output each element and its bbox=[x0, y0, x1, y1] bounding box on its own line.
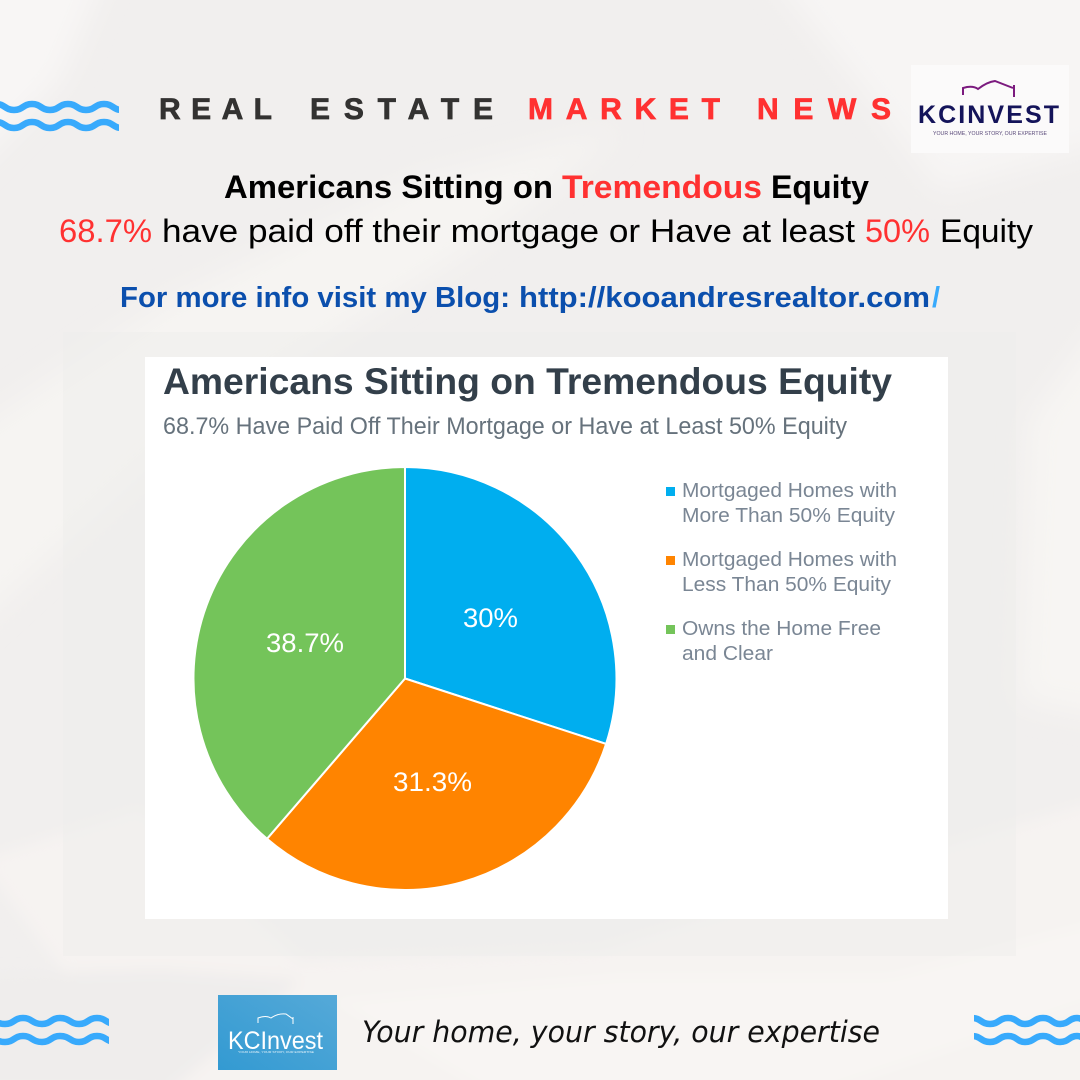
legend item: free and clear: and Clear bbox=[682, 643, 773, 665]
slice: 30% bbox=[405, 467, 616, 744]
logo: KCInvest blue bbox=[218, 995, 337, 1070]
panel: pie chart card bbox=[145, 357, 948, 919]
subheadline: Equity bbox=[940, 213, 1033, 249]
panel: chart backdrop bbox=[63, 332, 1016, 956]
pie labels bbox=[266, 603, 518, 797]
pie labels: 31.3% bbox=[393, 767, 472, 797]
headline bbox=[224, 169, 869, 205]
pie chart bbox=[193, 467, 616, 890]
heading: real estate market news: ESTATE bbox=[310, 93, 493, 126]
headline: Americans Sitting on bbox=[224, 169, 553, 205]
legend item: more than 50%: More Than 50% Equity bbox=[682, 505, 895, 527]
subheadline: 50% bbox=[865, 213, 930, 249]
pie labels: 30% bbox=[463, 603, 518, 633]
legend item: less than 50%: Less Than 50% Equity bbox=[682, 574, 891, 596]
legend item: less than 50%: Mortgaged Homes with bbox=[682, 549, 897, 571]
legend item: more than 50% bbox=[666, 480, 897, 527]
pie labels: 38.7% bbox=[266, 628, 344, 658]
icon: bottom right waves bbox=[972, 1018, 1080, 1042]
logo: KCINVEST: KCINVEST bbox=[918, 101, 1059, 129]
legend bbox=[666, 480, 897, 665]
legend item: free and clear: Owns the Home Free bbox=[682, 618, 881, 640]
subheadline bbox=[59, 213, 1033, 249]
subheadline: have paid off their mortgage or Have at least bbox=[162, 213, 855, 249]
headline: Equity bbox=[771, 169, 869, 205]
legend item: less than 50% bbox=[666, 549, 897, 596]
icon: bottom left waves bbox=[0, 1018, 116, 1042]
heading: real estate market news bbox=[159, 93, 891, 126]
slice: 38.7% bbox=[193, 467, 405, 839]
legend item: more than 50%: Mortgaged Homes with bbox=[682, 480, 897, 502]
logo: KCInvest blue: KCInvest bbox=[228, 1027, 323, 1055]
heading: real estate market news: REAL bbox=[159, 93, 272, 126]
legend item: free and clear bbox=[666, 618, 881, 665]
subheadline: 68.7% bbox=[59, 213, 152, 249]
logo: KCINVEST bbox=[911, 65, 1069, 153]
headline: Tremendous bbox=[562, 169, 762, 205]
chart subtitle: 68.7% Have Paid Off Their Mortgage or Have at Least 50% Equity bbox=[163, 413, 847, 440]
blog link: For more info visit my Blog: bbox=[120, 282, 510, 314]
tagline: Your home, your story, our expertise bbox=[362, 1015, 880, 1049]
blog link: http://kooandresrealtor.com bbox=[519, 282, 930, 314]
slice: 31.3% bbox=[267, 678, 606, 890]
icon: top left waves bbox=[0, 104, 122, 128]
heading: real estate market news: MARKET bbox=[528, 93, 720, 126]
heading: real estate market news: NEWS bbox=[757, 93, 891, 126]
logo: KCINVEST: YOUR HOME, YOUR STORY, OUR EXPERTISE bbox=[933, 131, 1047, 137]
logo: KCInvest blue: YOUR HOME, YOUR STORY, OUR EXPERTISE bbox=[238, 1050, 314, 1054]
chart title: Americans Sitting on Tremendous Equity bbox=[163, 361, 892, 402]
blog link: / bbox=[932, 282, 940, 314]
blog link bbox=[120, 282, 940, 314]
